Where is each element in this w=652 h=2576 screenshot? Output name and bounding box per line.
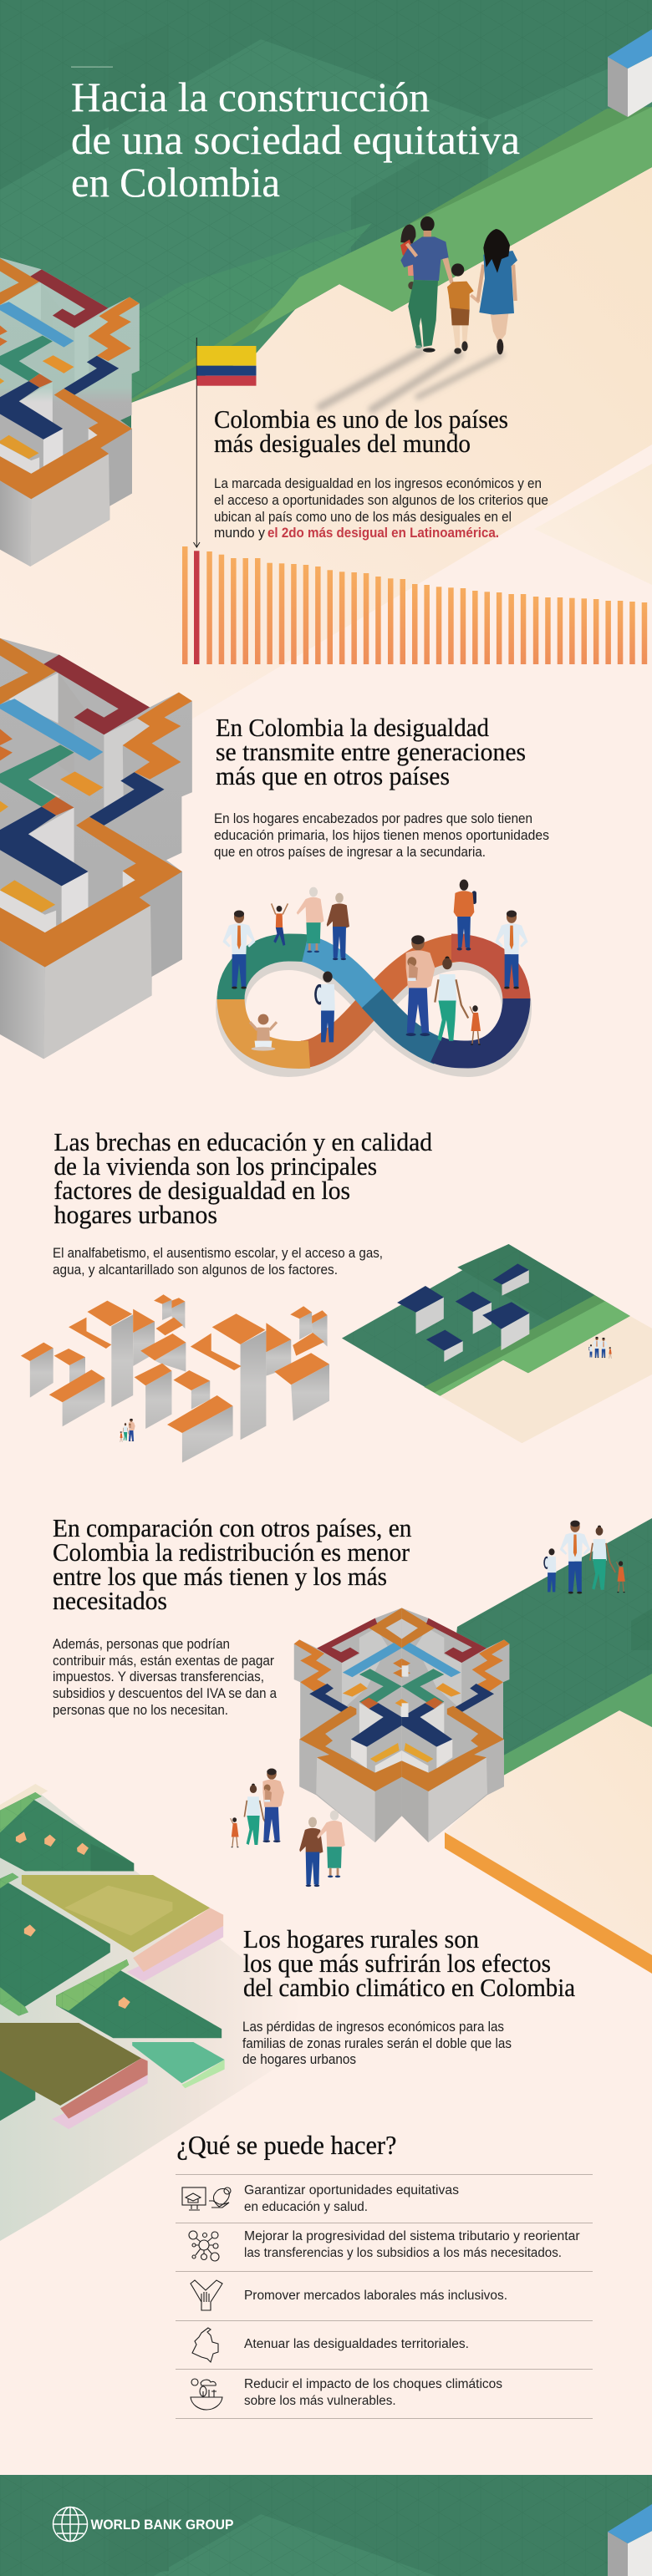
action 3 <box>191 2280 507 2310</box>
text: Promover mercados laborales más inclusivos. <box>244 2289 507 2303</box>
heading: section 2: En Colombia la desigualdad <box>216 713 489 742</box>
icon: network with money <box>189 2231 219 2261</box>
text: sobre los más vulnerables. <box>244 2394 396 2408</box>
text: section 3: agua, y alcantarillado son algunos de los factores. <box>53 1262 338 1278</box>
heading: section 4 <box>53 1513 412 1615</box>
heading: section 3: de la vivienda son los principales <box>53 1151 377 1181</box>
plot D <box>56 1959 222 2038</box>
person: grandmother <box>297 887 323 953</box>
person: student with backpack <box>314 971 335 1042</box>
title <box>71 74 520 206</box>
text: en educación y salud. <box>244 2200 368 2214</box>
heading: section 1: más desiguales del mundo <box>214 429 471 458</box>
person: child with raised arms <box>272 903 288 946</box>
title: en Colombia <box>71 159 280 206</box>
text: section 4: personas que no los necesitan. <box>53 1702 228 1718</box>
heading: section 5: del cambio climático en Colombia <box>243 1973 575 2002</box>
shadows of the family <box>320 351 502 409</box>
action 1 <box>182 2183 459 2214</box>
loop shadow <box>231 955 517 1062</box>
footer band <box>0 2475 652 2576</box>
icon: education monitor and health <box>182 2187 231 2210</box>
heading: section 4: Colombia la redistribución es menor <box>53 1537 410 1567</box>
person: man with tie, right <box>495 911 528 989</box>
person: girl <box>470 1005 481 1045</box>
text: section 5: familias de zonas rurales serán el doble que las <box>242 2035 512 2051</box>
text: section 1: el 2do más desigual en Latinoamérica. <box>267 525 499 541</box>
text: section 5: de hogares urbanos <box>242 2051 356 2067</box>
title: Hacia la construcción <box>71 74 430 120</box>
illustration: infinity loop of generations <box>222 880 528 1062</box>
text: section 5 <box>242 2019 512 2067</box>
text: section 4: Además, personas que podrían <box>53 1636 230 1652</box>
plot G <box>0 2070 35 2121</box>
list of actions <box>176 2174 593 2418</box>
action 4 <box>192 2328 469 2362</box>
person: man with tie, left <box>222 911 256 989</box>
text: section 4: contribuir más, están exentas de pagar <box>53 1653 274 1669</box>
illustration: urban buildings <box>21 1294 329 1463</box>
heading: section 2: más que en otros países <box>216 761 450 790</box>
bar chart: inequality by country <box>182 546 647 664</box>
icon: joined hands <box>191 2280 222 2310</box>
maze block 1 <box>0 257 140 567</box>
icon: globe <box>53 2507 87 2542</box>
person: youth with hoodie <box>454 880 476 950</box>
icon: map of Colombia <box>192 2328 218 2362</box>
loop band <box>231 948 517 1054</box>
person: father with baby <box>406 935 435 1036</box>
text <box>244 2229 580 2260</box>
illustration: rural plot with houses <box>342 1244 652 1443</box>
small family on the plot <box>588 1337 612 1358</box>
heading: section 5: Los hogares rurales son <box>243 1924 479 1954</box>
heading: section 4: entre los que más tienen y los más <box>53 1562 387 1591</box>
heading: section 4: necesitados <box>53 1586 167 1615</box>
World Bank Group logo: WORLD BANK GROUP <box>90 2517 234 2533</box>
text: las transferencias y los subsidios a los más necesitados. <box>244 2246 562 2260</box>
maze block 2 <box>0 638 192 1059</box>
text: section 1 <box>214 475 548 541</box>
text: section 2: En los hogares encabezados por padres que solo tienen <box>214 810 532 826</box>
text: section 4: subsidios y descuentos del IVA se dan a <box>53 1685 277 1701</box>
text: Garantizar oportunidades equitativas <box>244 2183 459 2197</box>
plot A <box>0 1784 134 1871</box>
text: section 1: el acceso a oportunidades son algunos de los criterios que <box>214 492 548 508</box>
text: section 3 <box>53 1245 383 1278</box>
heading: section 3: Las brechas en educación y en calidad <box>53 1127 432 1156</box>
text: section 2 <box>214 810 549 860</box>
heading: section 2 <box>216 713 526 790</box>
text: section 5: Las pérdidas de ingresos económicos para las <box>242 2019 504 2035</box>
person: mother <box>435 956 468 1041</box>
person: grandfather <box>327 893 349 960</box>
heading: section 3: factores de desigualdad en los <box>53 1176 350 1205</box>
icon: climate globe <box>191 2379 222 2410</box>
action 2 <box>189 2229 580 2261</box>
text: section 3: El analfabetismo, el ausentismo escolar, y el acceso a gas, <box>53 1245 383 1261</box>
flag and arrow pointing at Colombia <box>194 338 256 547</box>
action 5 <box>191 2377 502 2410</box>
illustration: family walking <box>400 216 517 354</box>
text <box>244 2377 502 2408</box>
heading: section 1: Colombia es uno de los países <box>214 404 508 434</box>
maze block 3 <box>294 1608 509 1842</box>
plot C <box>22 1875 223 1982</box>
title rule <box>71 67 113 68</box>
text: section 2: que en otros países de ingresar a la secundaria. <box>214 844 486 860</box>
text: Atenuar las desigualdades territoriales. <box>244 2337 469 2351</box>
heading: section 5 <box>243 1924 575 2002</box>
heading: section 1 <box>214 404 508 458</box>
small family among the buildings <box>120 1419 135 1441</box>
background: second terrain <box>443 1518 652 1974</box>
family at the top of the terrain <box>543 1521 625 1594</box>
heading: section 3 <box>53 1127 432 1229</box>
background: rural fade <box>0 1788 301 2241</box>
title: de una sociedad equitativa <box>71 116 520 163</box>
plot E <box>0 2023 148 2129</box>
text: Mejorar la progresividad del sistema tributario y reorientar <box>244 2229 580 2243</box>
person: baby sitting <box>250 1014 277 1051</box>
heading: what can be done: ¿Qué se puede hacer? <box>176 2130 396 2160</box>
heading: section 4: En comparación con otros países, en <box>53 1513 412 1542</box>
background: green header terrain <box>0 0 652 510</box>
heading: section 3: hogares urbanos <box>53 1200 217 1229</box>
house at the top right <box>608 29 652 117</box>
text: section 1: mundo y <box>214 525 265 541</box>
text: Reducir el impacto de los choques climáticos <box>244 2377 502 2391</box>
plot F <box>132 2042 225 2088</box>
background: cream ground <box>0 167 652 836</box>
plot B <box>0 1873 110 2016</box>
World Bank Group logo <box>53 2507 234 2542</box>
text <box>244 2183 459 2214</box>
heading: section 2: se transmite entre generaciones <box>216 737 526 766</box>
text: section 4: impuestos. Y diversas transferencias, <box>53 1669 264 1684</box>
text: section 4 <box>53 1636 277 1718</box>
family and elders beside the block <box>231 1769 345 1887</box>
illustration: rural plots <box>0 1784 225 2129</box>
text: section 1: La marcada desigualdad en los ingresos económicos y en <box>214 475 542 491</box>
text: section 1: ubican al país como uno de los más desiguales en el <box>214 509 512 525</box>
text: section 2: educación primaria, los hijos tienen menos oportunidades <box>214 827 549 843</box>
heading: section 5: los que más sufrirán los efectos <box>243 1949 551 1978</box>
